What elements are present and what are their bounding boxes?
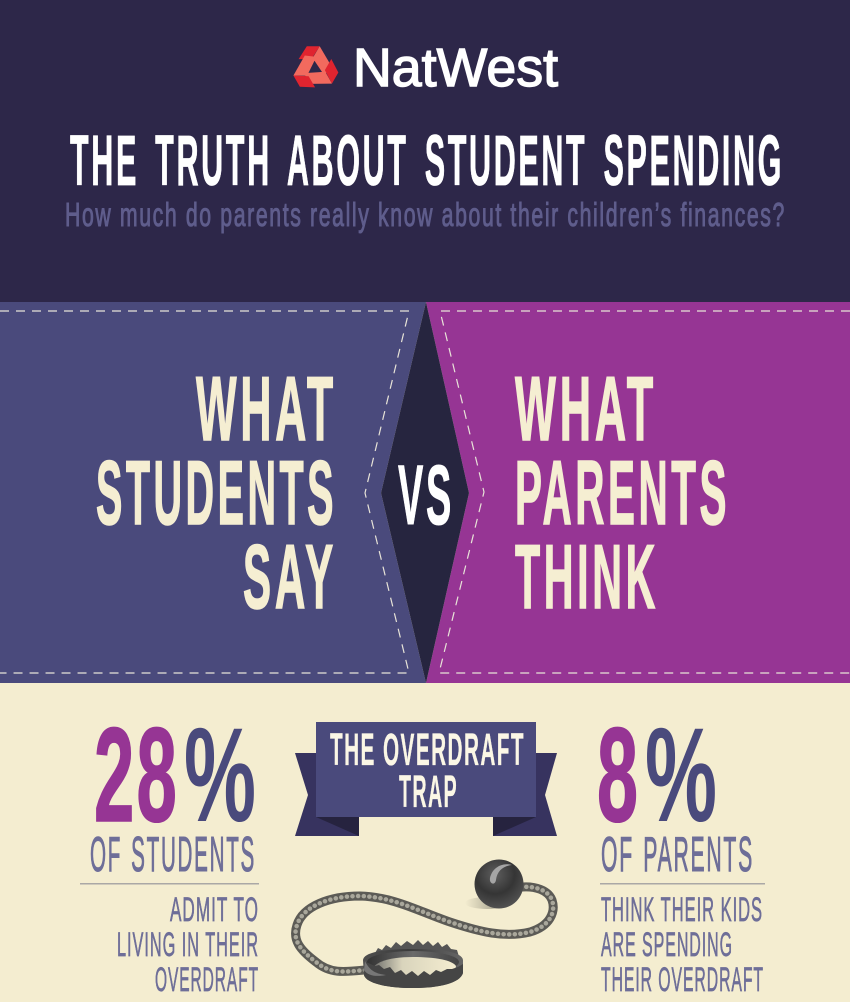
description: students: ADMIT TO [170,891,259,929]
trap opening [373,957,456,978]
stat: 28 percent of students [80,701,259,999]
heading: what students say [96,359,337,628]
trap body [363,949,463,988]
chain [296,887,553,972]
ball shadow [465,897,509,909]
stat: 8 percent of parents [597,701,765,999]
back teeth [372,940,460,960]
banner text [330,724,525,817]
icon: NatWest symbol [288,46,342,94]
panel: overdraft section: OVERDRAFT [155,961,259,999]
logo wordmark: NatWest [353,38,558,98]
panel: what students say: WHAT [196,359,337,460]
dashed border left [0,311,409,673]
heading: what parents think [515,359,730,628]
number 28: 28 [94,701,179,850]
dashed border right [439,311,850,673]
inner back wall [367,951,459,973]
icon: ball and chain trap [296,860,553,988]
panel: overdraft section [0,683,850,1002]
panel: what students say [0,302,426,683]
banner: the overdraft trap: THE OVERDRAFT [330,724,525,775]
heading: what parents think: WHAT [515,359,657,460]
panel: overdraft section: LIVING IN THEIR [117,926,259,964]
vs diamond: VS [398,448,454,542]
description: parents [601,891,764,999]
logo: NatWest [288,38,558,98]
panel: what students say: STUDENTS [96,443,337,544]
panel: what parents think [426,302,850,683]
panel: what students say: SAY [243,527,337,628]
trap highlight [364,961,386,976]
panel: header [0,0,850,302]
description: students [117,891,259,999]
ball [474,860,524,908]
percent sign: % [184,701,256,850]
front teeth [364,962,463,988]
number 8: 8 [597,701,638,850]
banner: the overdraft trap [295,722,557,836]
banner text: TRAP [399,766,458,817]
percent sign: % [645,701,717,850]
vs diamond [381,302,469,683]
heading: what parents think: THINK [515,527,659,628]
trap [363,940,463,988]
panel: overdraft section: OF STUDENTS [90,828,256,882]
